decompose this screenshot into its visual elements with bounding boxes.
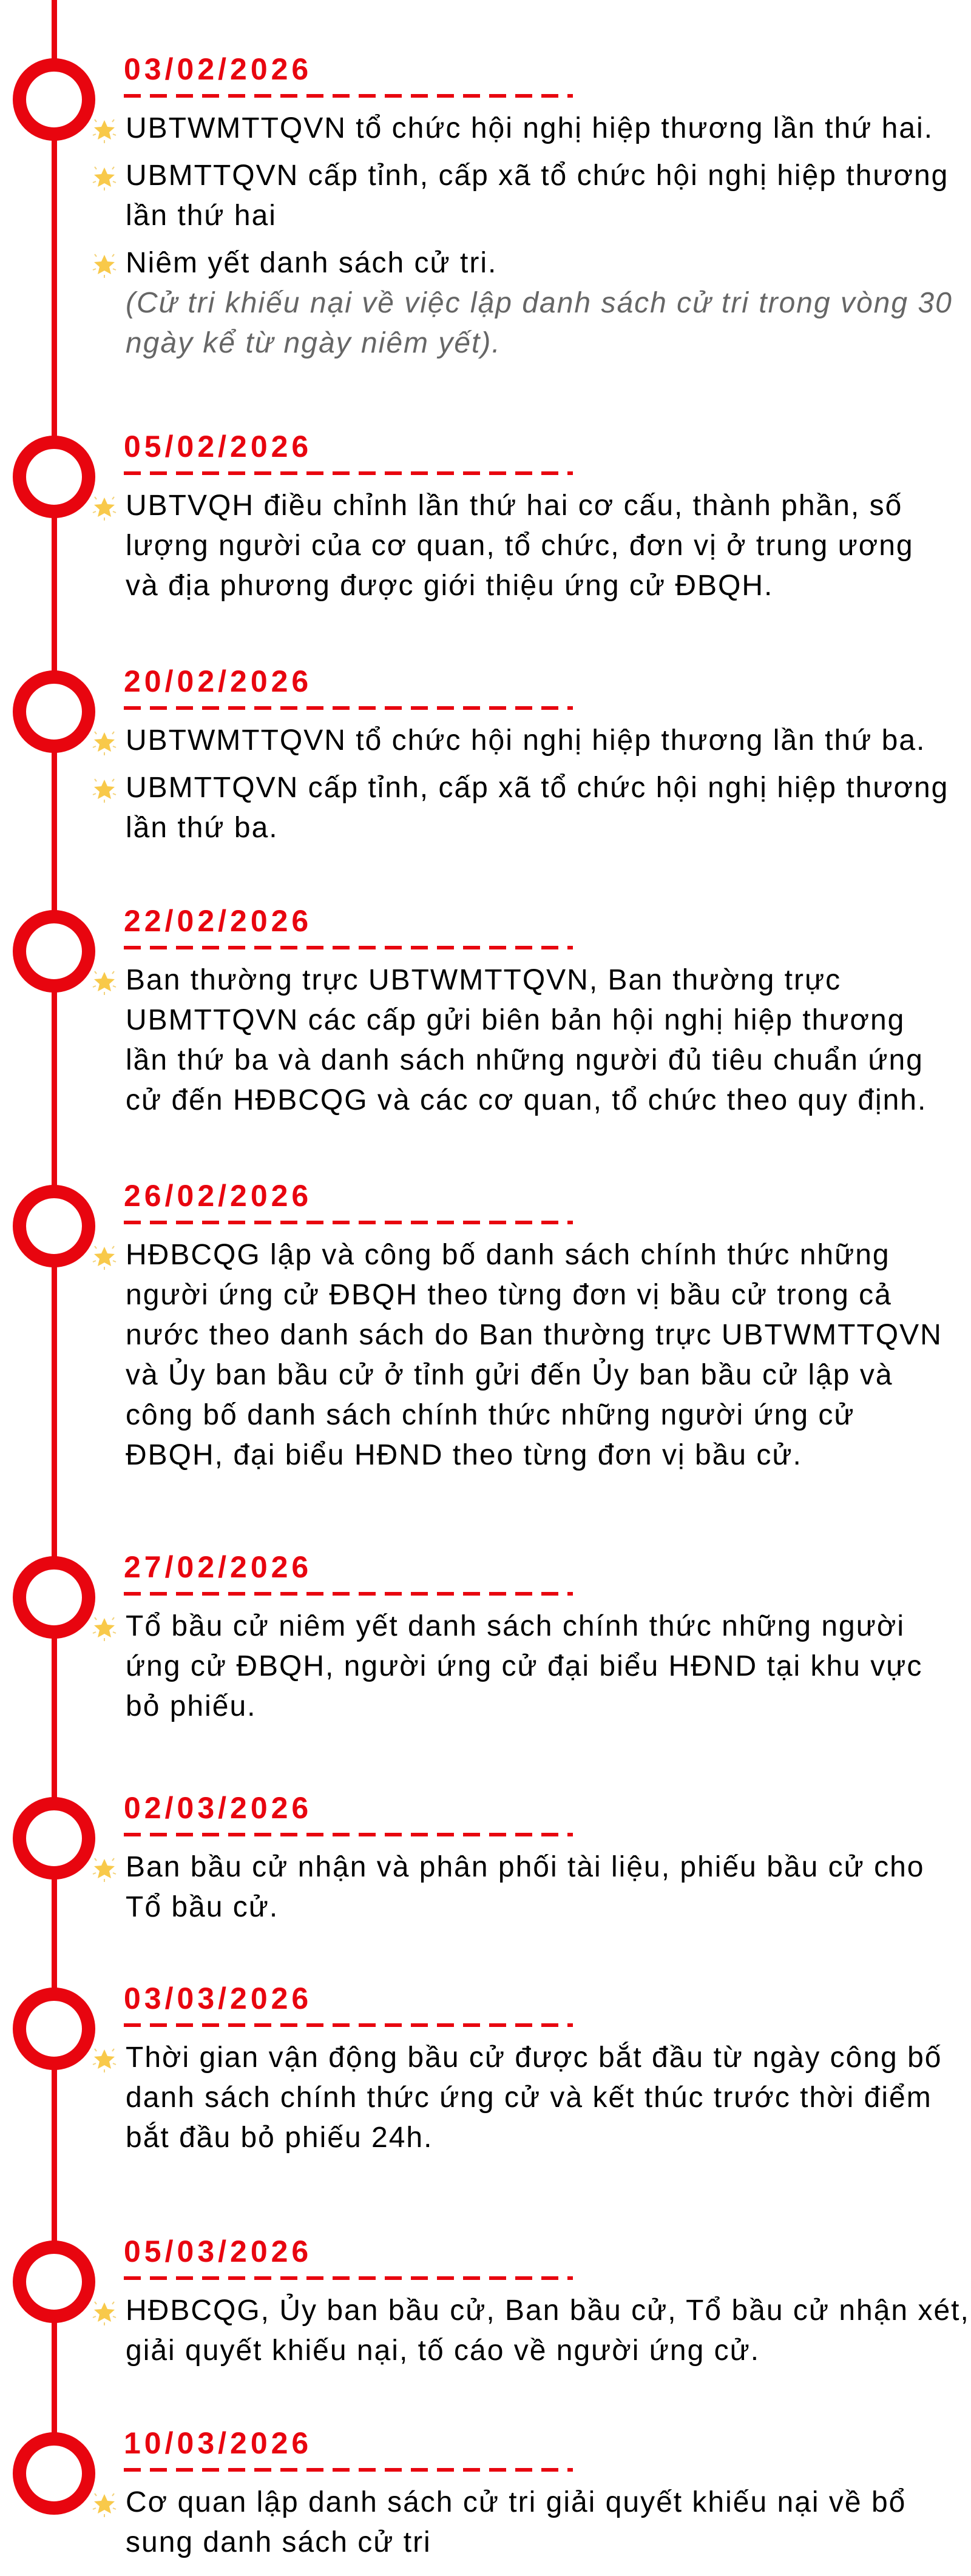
bullet 3 bbox=[92, 247, 953, 359]
date: 10/03/2026: 10/03/2026 bbox=[124, 2426, 312, 2460]
marker circle 2 bbox=[13, 436, 95, 518]
text block: 20/02 tasks: lần thứ ba. bbox=[126, 812, 279, 844]
date: 03/02/2026: 03/02/2026 bbox=[124, 52, 312, 86]
text block: 05/03 tasks bbox=[92, 2293, 970, 2367]
entry: 26/02/2026 bbox=[13, 1179, 942, 1471]
text block: 03/03 tasks: bắt đầu bỏ phiếu 24h. bbox=[126, 2122, 433, 2154]
entry: 03/03/2026 bbox=[13, 1981, 942, 2512]
bullet 2 bbox=[92, 160, 949, 232]
marker circle 8 bbox=[13, 1988, 95, 2070]
text block: 27/02 tasks: ứng cử ĐBQH, người ứng cử đại biểu HĐND tại khu vực bbox=[126, 1650, 922, 1682]
marker circle 7 bbox=[13, 1797, 95, 1880]
date: 22/02/2026: 22/02/2026 bbox=[124, 904, 312, 938]
text block: 20/02 tasks: UBMTTQVN cấp tỉnh, cấp xã tổ chức hội nghị hiệp thương bbox=[126, 772, 949, 804]
marker circle 10 bbox=[13, 2432, 95, 2515]
text block: 22/02 tasks: cử đến HĐBCQG và các cơ quan, tổ chức theo quy định. bbox=[126, 1084, 927, 1116]
bullet 2: lần thứ hai bbox=[126, 200, 277, 232]
text block: 03/03 tasks: Thời gian vận động bầu cử được bắt đầu từ ngày công bố bbox=[126, 2042, 942, 2074]
date: 03/03/2026: 03/03/2026 bbox=[124, 1981, 312, 2015]
date: 02/03/2026: 02/03/2026 bbox=[124, 1791, 312, 1825]
text block: 05/02 tasks: và địa phương được giới thiệu ứng cử ĐBQH. bbox=[126, 570, 773, 602]
date: 26/02/2026: 26/02/2026 bbox=[124, 1179, 312, 1213]
text block: 05/03 tasks: giải quyết khiếu nại, tố cáo về người ứng cử. bbox=[126, 2335, 760, 2367]
entry: 20/02/2026 bbox=[16, 664, 949, 989]
bullet 3: (Cử tri khiếu nại về việc lập danh sách cử tri trong vòng 30 bbox=[126, 287, 953, 319]
text block: 02/03 tasks: Tổ bầu cử. bbox=[126, 1891, 279, 1923]
text block: 26/02 tasks: nước theo danh sách do Ban thường trực UBTWMTTQVN bbox=[126, 1319, 942, 1351]
date: 20/02/2026: 20/02/2026 bbox=[124, 664, 312, 698]
text block: 22/02 tasks: UBMTTQVN các cấp gửi biên bản hội nghị hiệp thương bbox=[126, 1004, 905, 1036]
text block: 03/02 tasks bbox=[92, 112, 953, 359]
text block: 20/02 tasks bbox=[92, 724, 949, 844]
text block: 27/02 tasks bbox=[92, 1610, 922, 1722]
bullet 1: UBTWMTTQVN tổ chức hội nghị hiệp thương lần thứ hai. bbox=[126, 112, 933, 144]
timeline vertical line bbox=[52, 0, 57, 2475]
date: 05/03/2026: 05/03/2026 bbox=[124, 2234, 312, 2268]
text block: 03/03 tasks bbox=[92, 2042, 942, 2154]
text block: 26/02 tasks: người ứng cử ĐBQH theo từng đơn vị bầu cử trong cả bbox=[126, 1279, 892, 1311]
text block: 02/03 tasks bbox=[92, 1851, 924, 1923]
entry: 10/03/2026 bbox=[13, 2426, 906, 2558]
text block: 05/03 tasks: HĐBCQG, Ủy ban bầu cử, Ban bầu cử, Tổ bầu cử nhận xét, bbox=[126, 2294, 970, 2327]
text block: 22/02 tasks: lần thứ ba và danh sách những người đủ tiêu chuẩn ứng bbox=[126, 1044, 924, 1076]
marker circle 9 bbox=[13, 2241, 95, 2323]
text block: 22/02 tasks: Ban thường trực UBTWMTTQVN, Ban thường trực bbox=[126, 964, 841, 996]
text block: 26/02 tasks: công bố danh sách chính thức những người ứng cử bbox=[126, 1399, 854, 1431]
text block: 26/02 tasks: ĐBQH, đại biểu HĐND theo từng đơn vị bầu cử. bbox=[126, 1439, 802, 1471]
entry: 05/03/2026 bbox=[13, 2234, 970, 2512]
date: 27/02/2026: 27/02/2026 bbox=[124, 1550, 312, 1584]
date: 05/02/2026: 05/02/2026 bbox=[124, 430, 312, 464]
text block: 26/02 tasks bbox=[92, 1239, 942, 1471]
entry: 27/02/2026 bbox=[13, 1550, 922, 2512]
text block: 27/02 tasks: bỏ phiếu. bbox=[126, 1690, 257, 1722]
text block: 20/02 tasks: UBTWMTTQVN tổ chức hội nghị hiệp thương lần thứ ba. bbox=[126, 724, 925, 757]
text block: 03/03 tasks: danh sách chính thức ứng cử và kết thúc trước thời điểm bbox=[126, 2082, 932, 2114]
text block: 27/02 tasks: Tổ bầu cử niêm yết danh sách chính thức những người bbox=[126, 1610, 905, 1642]
marker circle 1 bbox=[13, 58, 95, 141]
text block: 02/03 tasks: Ban bầu cử nhận và phân phối tài liệu, phiếu bầu cử cho bbox=[126, 1851, 924, 1883]
entry: 03/02/2026 bbox=[17, 52, 953, 359]
text block: 10/03 tasks: sung danh sách cử tri bbox=[126, 2526, 431, 2558]
marker circle 3 bbox=[13, 670, 95, 753]
text block: 10/03 tasks bbox=[92, 2486, 906, 2558]
marker circle 4 bbox=[13, 910, 95, 993]
text block: 05/02 tasks bbox=[92, 490, 914, 602]
marker circle 5 bbox=[13, 1185, 95, 1267]
entry: 22/02/2026 bbox=[16, 904, 927, 1116]
bullet 3: ngày kể từ ngày niêm yết). bbox=[126, 327, 501, 359]
text block: 05/02 tasks: lượng người của cơ quan, tổ chức, đơn vị ở trung ương bbox=[126, 530, 914, 562]
text block: 22/02 tasks bbox=[92, 964, 927, 1116]
bullet 2: UBMTTQVN cấp tỉnh, cấp xã tổ chức hội nghị hiệp thương bbox=[126, 160, 949, 192]
text block: 26/02 tasks: và Ủy ban bầu cử ở tỉnh gửi đến Ủy ban bầu cử lập và bbox=[126, 1359, 893, 1391]
marker circle 6 bbox=[13, 1556, 95, 1639]
entry: 02/03/2026 bbox=[13, 1791, 924, 2512]
bullet 3: Niêm yết danh sách cử tri. bbox=[126, 247, 497, 279]
entry: 05/02/2026 bbox=[13, 430, 914, 989]
text block: 05/02 tasks: UBTVQH điều chỉnh lần thứ hai cơ cấu, thành phần, số bbox=[126, 490, 902, 522]
text block: 10/03 tasks: Cơ quan lập danh sách cử tri giải quyết khiếu nại về bổ bbox=[126, 2486, 906, 2518]
text block: 26/02 tasks: HĐBCQG lập và công bố danh sách chính thức những bbox=[126, 1239, 890, 1271]
